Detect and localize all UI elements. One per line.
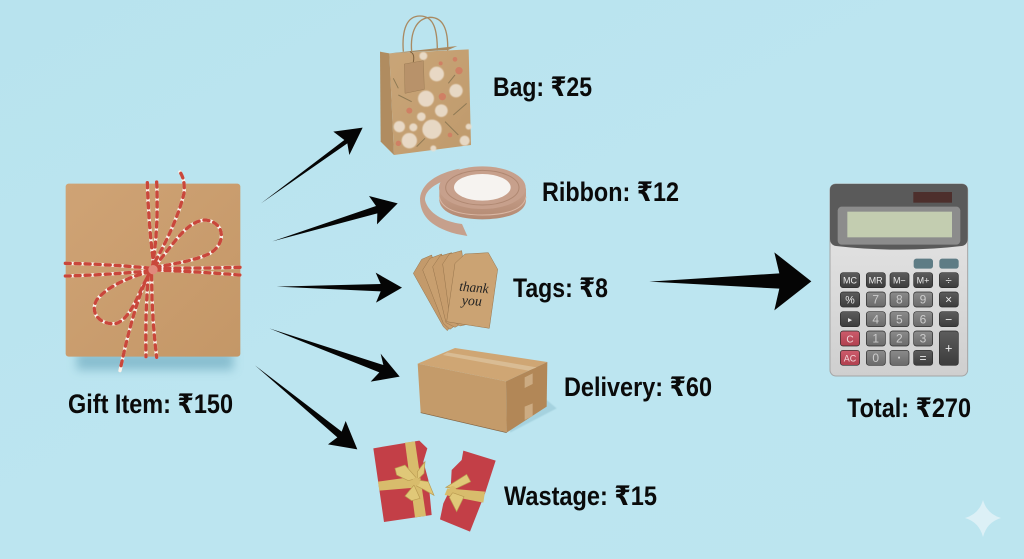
icon: calculator: MC bbox=[843, 275, 857, 285]
label: tags: Tags: ₹8 bbox=[513, 273, 608, 303]
icon: calculator: ► bbox=[847, 317, 853, 324]
arrows: gift item to costs bbox=[255, 128, 402, 449]
arrow: to ribbon bbox=[272, 196, 398, 241]
icon: shopping bag bbox=[380, 16, 472, 155]
icon: calculator: C bbox=[846, 334, 854, 345]
label: total: Total: ₹270 bbox=[847, 393, 971, 423]
icon: calculator: × bbox=[945, 293, 952, 307]
icon: calculator: 2 bbox=[896, 332, 903, 346]
icon: calculator: 9 bbox=[920, 293, 927, 307]
icon: calculator: ÷ bbox=[946, 275, 952, 287]
icon: calculator: 6 bbox=[920, 312, 927, 326]
arrow: to calculator bbox=[649, 252, 811, 310]
icon: sparkle watermark bbox=[965, 500, 1001, 537]
label: ribbon: Ribbon: ₹12 bbox=[542, 177, 679, 207]
icon: calculator: 3 bbox=[920, 332, 927, 346]
icon: thank you tags: you bbox=[459, 294, 482, 310]
icon: calculator: AC bbox=[844, 353, 857, 363]
icon: thank you tags bbox=[413, 251, 498, 331]
icon: calculator: % bbox=[845, 294, 855, 306]
icon: calculator: = bbox=[919, 351, 926, 365]
icon: calculator: M+ bbox=[917, 275, 929, 285]
label: wastage: Wastage: ₹15 bbox=[504, 481, 657, 511]
icon: calculator: 0 bbox=[872, 351, 879, 365]
icon: torn red gift bbox=[373, 441, 496, 532]
arrow: to delivery bbox=[269, 328, 400, 382]
icon: calculator: 1 bbox=[872, 332, 879, 346]
icon: calculator: 5 bbox=[896, 312, 903, 326]
arrow: to tags bbox=[277, 273, 402, 303]
arrow: to bag bbox=[261, 128, 363, 203]
arrow: to wastage bbox=[255, 365, 357, 449]
label: gift item: Gift Item: ₹150 bbox=[68, 389, 233, 419]
icon: calculator: 4 bbox=[872, 312, 879, 326]
icon: calculator: + bbox=[945, 341, 952, 355]
icon: calculator: − bbox=[945, 312, 952, 326]
icon: calculator: · bbox=[897, 350, 901, 364]
icon: calculator: 8 bbox=[896, 293, 903, 307]
icon: calculator bbox=[830, 184, 968, 376]
label: bag: Bag: ₹25 bbox=[493, 72, 592, 102]
icon: calculator: M− bbox=[893, 275, 906, 285]
icon: calculator: 7 bbox=[872, 293, 879, 307]
icon: delivery box bbox=[418, 348, 557, 433]
icon: ribbon spool bbox=[420, 166, 526, 236]
icon: gift box with twine bbox=[65, 172, 240, 371]
label: delivery: Delivery: ₹60 bbox=[564, 372, 712, 402]
icon: calculator: MR bbox=[869, 275, 883, 285]
icon: thank you tags: thank bbox=[459, 280, 490, 297]
